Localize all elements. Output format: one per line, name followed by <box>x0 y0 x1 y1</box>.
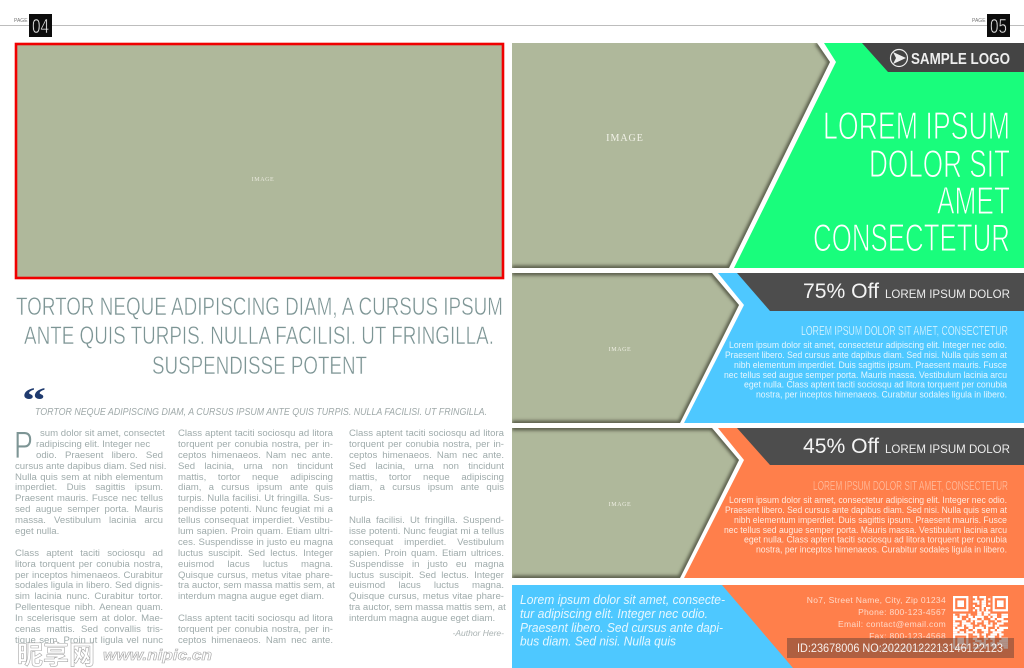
page number left: 04 <box>32 16 49 38</box>
image placeholder with red frame: IMAGE <box>252 177 274 183</box>
body text column 2: Class aptent taciti sociosqu ad litora <box>178 613 333 624</box>
drop cap: P <box>14 425 33 467</box>
body text column 3: Quisque cursus, metus vitae phare- <box>349 591 504 602</box>
panel: footer blue message: tur adipiscing elit. Integer nec odio. <box>520 607 708 621</box>
nipic watermark: www.nipic.cn <box>103 647 212 664</box>
logo bar: SAMPLE LOGO <box>911 51 1010 68</box>
contact details: www.website.com <box>873 643 946 653</box>
body text column 3: Suspendisse in justo eu magna <box>349 559 504 570</box>
panel: footer orange contact <box>722 585 1024 668</box>
body text column 3: luctus suscipit. Sed lectus. Integer <box>349 570 504 581</box>
quotation mark: “ <box>22 380 46 420</box>
panel: blue 75% offer <box>684 273 1024 423</box>
body text column 2: Quisque cursus, metus vitae phare- <box>178 570 333 581</box>
body text column 1: Praesent mauris. Fusce nec tellus <box>15 493 163 504</box>
contact details: Phone: 800-123-4567 <box>858 607 946 617</box>
panel: top image arrow <box>512 43 830 268</box>
contact details: Email: contact@email.com <box>838 619 946 629</box>
panel: top image arrow: IMAGE <box>606 133 644 144</box>
body text column 2: diam, a cursus ipsum ante quis <box>178 482 333 493</box>
page number right <box>972 14 1010 38</box>
panel: blue 75% offer: 75% Off <box>803 280 879 303</box>
body text column 2: Class aptent taciti sociosqu ad litora <box>178 428 333 439</box>
panel: footer blue message: Lorem ipsum dolor sit amet, consecte- <box>520 593 725 607</box>
body text column 2: ces. Suspendisse in justo eu magna <box>178 537 333 548</box>
body text column 1: massa. Vestibulum lacinia arcu <box>15 515 163 526</box>
panel: orange 45% offer: nec tellus sed augue semper porta. Mauris massa. Vestibulum lacinia arcu <box>724 525 1007 535</box>
body text column 2: tra auctor, sem massa mattis sem, at <box>178 580 335 591</box>
ID watermark bar: ID:23678006 NO:20220122213146122123 <box>797 643 1003 655</box>
panel: middle image arrow <box>512 273 739 423</box>
body text column 3: torquent per conubia nostra, per in- <box>349 439 504 450</box>
body text column 3: tra auctor, sem massa mattis sem, at <box>349 602 506 613</box>
body text column 3: isse potenti. Nunc feugiat mi a tellus <box>349 526 504 537</box>
panel: orange 45% offer <box>684 428 1024 578</box>
body text column 2: ceptos himenaeos. Nam nec ante. <box>178 635 333 646</box>
body text column 2: interdum magna augue eget diam. <box>178 591 324 602</box>
body text column 1: Class aptent taciti sociosqu ad <box>15 548 163 559</box>
image placeholder with red frame <box>16 44 503 278</box>
body text column 1: tique sem. Proin ut ligula vel nunc <box>15 635 163 646</box>
body text column 1: odio. Praesent libero. Sed <box>36 450 163 461</box>
body text column 2: lum sapien. Proin quam. Etiam ultri- <box>178 526 333 537</box>
page number left: PAGE <box>14 18 28 24</box>
body text column 3: turpis. <box>349 493 375 504</box>
body text column 1: sum dolor sit amet, consectet <box>40 428 165 439</box>
body text column 3: Nulla facilisi. Ut fringilla. Suspend- <box>349 515 504 526</box>
QR code <box>953 596 1008 651</box>
body text column 1: Nulla quis sem at nibh elementum <box>15 472 163 483</box>
panel: lower image arrow: IMAGE <box>609 502 631 508</box>
body text column 3: Sed lacinia, urna non tincidunt <box>349 461 504 472</box>
body text column 2: euismod lacus luctus magna. <box>178 559 333 570</box>
main heading <box>16 293 503 380</box>
body text column 1: litora torquent per conubia nostra, <box>15 559 163 570</box>
green panel headline <box>813 105 1010 260</box>
body text column 2: tellus consequat imperdiet. Vestibu- <box>178 515 333 526</box>
panel: blue 75% offer: LOREM IPSUM DOLOR <box>885 287 1010 301</box>
author credit: -Author Here- <box>452 628 504 638</box>
body text column 3: sapien. Proin quam. Etiam ultrices. <box>349 548 504 559</box>
pull quote: TORTOR NEQUE ADIPISCING DIAM, A CURSUS IPSUM ANTE QUIS TURPIS. NULLA FACILISI. UT FRINGILLA. <box>35 406 487 418</box>
body text column 3: Class aptent taciti sociosqu ad litora <box>349 428 504 439</box>
body text column 1 <box>15 428 166 646</box>
body text column 2: pendisse potenti. Nunc feugiat mi a <box>178 504 333 515</box>
panel: orange 45% offer: nostra, per inceptos himenaeos. Curabitur sodales ligula in libero. <box>756 544 1007 554</box>
panel: blue 75% offer: nibh elementum imperdiet. Duis sagittis ipsum. Praesent mauris. Fusce <box>734 360 1007 370</box>
panel: footer blue message <box>512 585 1024 668</box>
body text column 1: imperdiet. Duis sagittis ipsum. <box>15 482 163 493</box>
body text column 3: euismod lacus luctus magna. <box>349 580 504 591</box>
panel: orange 45% offer: LOREM IPSUM DOLOR <box>885 442 1010 456</box>
panel: blue 75% offer: eget nulla. Class aptent taciti sociosqu ad litora torquent per conubia <box>744 380 1007 390</box>
main heading: SUSPENDISSE POTENT <box>152 352 367 380</box>
body text column 1: cursus ante dapibus diam. Sed nisi. <box>15 461 166 472</box>
body text column 3: ceptos himenaeos. Nam nec ante. <box>349 450 504 461</box>
panel: blue 75% offer: Lorem ipsum dolor sit amet, consectetur adipiscing elit. Integer nec odio. <box>729 340 1007 350</box>
panel: orange 45% offer: Praesent libero. Sed cursus ante dapibus diam. Sed nisi. Nulla quis sem at <box>725 505 1007 515</box>
contact details: Fax: 800-123-4568 <box>869 631 946 641</box>
contact details <box>807 595 946 653</box>
body text column 2: ceptos himenaeos. Nam nec ante. <box>178 450 333 461</box>
panel: middle image arrow: IMAGE <box>609 347 631 353</box>
page number left <box>14 14 52 38</box>
panel: footer blue message: bus diam. Sed nisi. Nulla quis <box>520 634 676 648</box>
body text column 2: torquent per conubia nostra, per in- <box>178 624 333 635</box>
contact details: No7, Street Name, City, Zip 01234 <box>807 595 946 605</box>
panel: blue 75% offer: Praesent libero. Sed cursus ante dapibus diam. Sed nisi. Nulla quis sem at <box>725 350 1007 360</box>
page number right: 05 <box>990 16 1007 38</box>
panel: green headline <box>734 43 1024 268</box>
body text column 1: Pellentesque nibh. Aenean quam. <box>15 602 163 613</box>
body text column 1: sed augue semper porta. Mauris <box>15 504 163 515</box>
body text column 1: sim lacinia nunc. Curabitur tortor. <box>15 591 163 602</box>
body text column 3: consequat imperdiet. Vestibulum <box>349 537 504 548</box>
header rule <box>0 24 1024 26</box>
body text column 3 <box>349 428 506 624</box>
main heading: ANTE QUIS TURPIS. NULLA FACILISI. UT FRINGILLA. <box>24 322 494 350</box>
body text column 3: diam, a cursus ipsum ante quis <box>349 482 504 493</box>
body text column 2 <box>178 428 335 646</box>
panel: lower image arrow <box>512 428 739 578</box>
panel: orange 45% offer: 45% Off <box>803 435 879 458</box>
panel: orange 45% offer: Lorem ipsum dolor sit amet, consectetur adipiscing elit. Integer nec odio. <box>729 495 1007 505</box>
body text column 3: interdum magna augue eget diam. <box>349 613 495 624</box>
body text column 3: mattis, tortor neque adipiscing <box>349 472 504 483</box>
body text column 2: Sed lacinia, urna non tincidunt <box>178 461 333 472</box>
panel: blue 75% offer: nec tellus sed augue semper porta. Mauris massa. Vestibulum lacinia arcu <box>724 370 1007 380</box>
body text column 2: torquent per conubia nostra, per in- <box>178 439 333 450</box>
panel: orange 45% offer: eget nulla. Class aptent taciti sociosqu ad litora torquent per conubia <box>744 534 1007 544</box>
body text column 1: eget nulla. <box>15 526 59 537</box>
body text column 1: per inceptos himenaeos. Curabitur <box>15 570 163 581</box>
body text column 1: sodales ligula in libero. Sed dignis- <box>15 580 163 591</box>
body text column 2: mattis, tortor neque adipiscing <box>178 472 333 483</box>
page number right: PAGE <box>972 18 986 24</box>
panel: orange 45% offer: nibh elementum imperdiet. Duis sagittis ipsum. Praesent mauris. Fusce <box>734 515 1007 525</box>
body text column 1: cenas mattis. Sed convallis tris- <box>15 624 163 635</box>
panel: blue 75% offer: nostra, per inceptos himenaeos. Curabitur sodales ligula in libero. <box>756 390 1007 400</box>
body text column 2: luctus suscipit. Sed lectus. Integer <box>178 548 333 559</box>
main heading: TORTOR NEQUE ADIPISCING DIAM, A CURSUS IPSUM <box>16 293 503 321</box>
panel: footer blue message: Praesent libero. Sed cursus ante dapi- <box>520 621 723 635</box>
logo bar <box>862 43 1024 72</box>
body text column 1: radipiscing elit. Integer nec <box>36 439 150 450</box>
body text column 2: turpis. Nulla facilisi. Ut fringilla. Sus- <box>178 493 333 504</box>
nipic watermark <box>17 640 212 668</box>
body text column 1: In scelerisque sem at dolor. Mae- <box>15 613 163 624</box>
ID watermark bar <box>787 638 1014 658</box>
